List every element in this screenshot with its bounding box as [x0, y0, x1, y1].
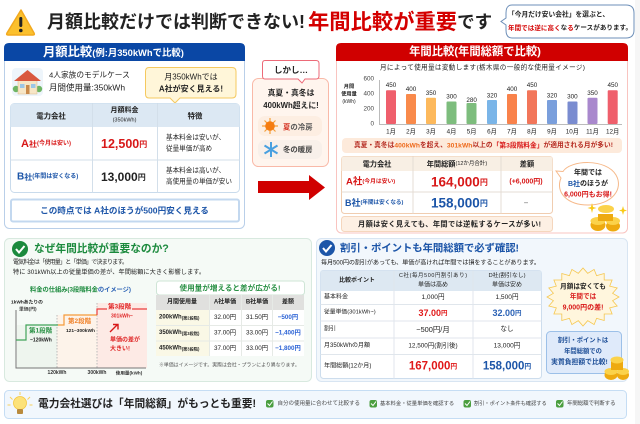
callout: header note: [501, 5, 634, 38]
bar chart: monthly usage: 月間: [344, 83, 354, 90]
row: company B: 基本料金は高いが、: [166, 166, 225, 174]
text: chart subtitle: 月によって使用量は変動します(栃木県の一般的な使用量イメージ): [380, 62, 585, 72]
row: monthly amount: 月350kWhの月額: [324, 341, 370, 349]
bar chart: monthly usage: 3月: [426, 128, 436, 136]
bar chart: monthly usage: 1月: [386, 128, 396, 136]
row: annual total: [324, 360, 531, 372]
text: why explanation: 電気料金は「使用量」と「単価」で決まります。: [13, 258, 128, 266]
row: 450 kWh: 33.00円: [246, 344, 268, 352]
text: why explanation: 特に 301kWh以上の従量単価の差が、年間総額に大きく影響します。: [13, 268, 205, 276]
table: unit price gap: A社単価: [214, 298, 236, 306]
row: basic fee: 1,000円: [421, 293, 445, 301]
checklist: check discounts: [464, 399, 547, 408]
row: company A: 基本料金は安いが、: [166, 132, 225, 142]
table: monthly price: 電力会社: [36, 112, 66, 120]
note: reversal: [342, 216, 552, 232]
bar chart: monthly usage: 使用量: [341, 90, 357, 98]
icon: green check: [12, 241, 28, 257]
callout: effective burden: [546, 332, 622, 374]
bar chart: monthly usage: 6月: [487, 128, 497, 136]
callout: effective burden: 年間総額での: [564, 346, 602, 355]
row: B annual: B社(年間は安くなる): [345, 197, 404, 208]
table: unit price gap: [156, 281, 304, 356]
callout: A looks cheaper: [146, 68, 236, 103]
checklist: check discounts: 割引・ポイント条件も確認する: [474, 399, 547, 407]
callout: header note: 年間では逆に高くなるケースがあります。: [508, 22, 632, 32]
checklist: compare by usage: [266, 399, 360, 408]
callout: effective burden: 割引・ポイントは: [558, 335, 609, 344]
checklist: compare by usage: 自分の使用量に合わせて比較する: [278, 399, 360, 407]
heading: why: なぜ年間比較が重要なのか?: [34, 242, 169, 255]
table: unit price gap: 使用量が増えると差が広がる!: [179, 282, 281, 292]
row: 450 kWh: [159, 344, 301, 352]
heading: bottom summary: 電力会社選びは「年間総額」がもっとも重要!: [38, 397, 256, 410]
table: monthly price: [10, 104, 240, 192]
row: B annual: 158,000円: [431, 196, 488, 210]
row: 350 kWh: 350kWh(第3段階): [159, 330, 200, 336]
callout: B saves 6000: 年間では: [574, 168, 602, 176]
chart: three-tier pricing: ~120kWh: [30, 338, 52, 344]
bar chart: monthly usage: 600: [363, 76, 374, 82]
banner: bottom summary: [4, 390, 626, 418]
bar chart: monthly usage: 400: [406, 86, 417, 93]
heading: annual comparison: 年間比較(年間総額で比較): [409, 44, 541, 58]
table: monthly price: (350kWh): [113, 118, 137, 124]
row: 450 kWh: 450kWh(第3段階): [159, 345, 200, 352]
row: unit price: 37.00円: [418, 308, 448, 318]
bar chart: monthly usage: 300: [446, 94, 457, 100]
row: 350 kWh: [159, 328, 301, 336]
chart: three-tier pricing: 120kWh: [48, 370, 66, 376]
heading: main title: 月額比較だけでは判断できない!年間比較が重要です: [47, 9, 492, 34]
bar chart: monthly usage: 7月: [507, 128, 517, 136]
row: 350 kWh: −1,400円: [275, 328, 301, 336]
callout: starburst 9000 yen: 年間では: [570, 292, 597, 300]
table: C vs D: 単価は安め: [492, 280, 522, 288]
bar chart: monthly usage: 11月: [586, 128, 599, 136]
checklist: judge by annual total: 年間総額で判断する: [567, 399, 616, 407]
table: unit price gap: 差額: [282, 298, 294, 306]
bar chart: monthly usage: [341, 76, 622, 136]
text: why explanation: [13, 258, 205, 276]
callout: header note: 「今月だけ安い会社」を選ぶと、: [508, 10, 609, 18]
bar chart: monthly usage: 350: [587, 90, 598, 97]
bar chart: monthly usage: 280: [466, 97, 477, 104]
panel: monthly comparison: [4, 43, 245, 228]
icon: warning triangle: [7, 10, 34, 35]
note: third tier: 真夏・真冬は400kWhを超え、301kWh以上の「第3段階料金」が適用される月が多い!: [354, 140, 613, 149]
row: 450 kWh: 37.00円: [214, 344, 236, 352]
row: company B: [17, 166, 232, 186]
row: company B: B社(年間は安くなる): [17, 172, 78, 182]
table: C vs D: D社(割引なし): [488, 271, 526, 279]
icon: gold coins: [588, 203, 627, 232]
bar chart: monthly usage: 450: [386, 82, 397, 89]
row: 200 kWh: 32.00円: [214, 313, 236, 321]
chart: three-tier pricing: 単価(円): [19, 306, 37, 312]
row: discount: なし: [500, 325, 514, 333]
chart: three-tier pricing: 第1段階: [29, 326, 53, 334]
row: unit price: 従量単価(301kWh~): [324, 308, 376, 316]
text: model case: 月間使用量:350kWh: [49, 82, 125, 92]
banner: monthly conclusion: [11, 200, 239, 222]
panel: discounts and points: [316, 238, 629, 382]
row: monthly amount: 12,500円(割引後): [408, 340, 458, 350]
table: annual total: [342, 156, 552, 214]
note: price disclaimer: ※単価はイメージです。実際は会社・プランにより異なります。: [159, 362, 300, 368]
text: over 400 kWh: 400kWh超えに!: [263, 100, 319, 110]
row: 200 kWh: 200kWh(第2段階): [159, 314, 200, 321]
row: company A: 従量単価が高め: [166, 144, 212, 152]
row: B annual: −: [524, 198, 529, 208]
row: annual total: 158,000円: [483, 360, 531, 372]
chart: three-tier pricing: 121~300kWh: [66, 328, 95, 334]
row: A annual: 164,000円: [431, 174, 488, 190]
bar chart: monthly usage: 320: [547, 92, 558, 100]
row: basic fee: 1,500円: [495, 293, 519, 301]
bar chart: monthly usage: 9月: [547, 128, 557, 136]
pill: summer cooling: 夏の冷房: [283, 122, 313, 131]
row: 200 kWh: −500円: [278, 313, 298, 321]
table: unit price gap: B社単価: [246, 298, 268, 306]
bar chart: monthly usage: 400: [507, 86, 518, 93]
note: reversal: 月額は安く見えても、年間では逆転するケースが多い!: [358, 220, 541, 228]
row: company B: 高使用量の単価が安い: [166, 176, 232, 186]
callout: B saves 6000: [556, 163, 618, 205]
table: annual total: 差額: [520, 160, 535, 168]
icon: house: [12, 68, 43, 96]
table: annual total: 年間総額(12か月合計): [427, 159, 487, 168]
row: A annual: A社(今月は安い): [346, 176, 395, 188]
heading: discounts: 割引・ポイントも年間総額で必ず確認!: [340, 242, 519, 254]
chart: three-tier pricing: 1kWhあたりの: [11, 298, 43, 306]
callout: starburst 9000 yen: 月額は安くても: [560, 282, 606, 290]
row: annual total: 167,000円: [409, 360, 457, 372]
title: [7, 9, 492, 35]
row: monthly amount: [324, 340, 521, 350]
bar chart: monthly usage: 4月: [447, 128, 456, 136]
text: discounts explanation: 毎月500円の割引があっても、単価が高ければ年間では損をすることがあります。: [321, 258, 540, 266]
bar chart: monthly usage: 10月: [566, 128, 579, 136]
row: company A: 12,500円: [101, 137, 147, 151]
bar chart: monthly usage: 8月: [527, 128, 537, 136]
table: C vs D: 比較ポイント: [339, 276, 375, 284]
text: model case: [49, 70, 130, 92]
text: over 400 kWh: [263, 88, 319, 110]
bar chart: monthly usage: 350: [426, 90, 437, 97]
callout: starburst 9000 yen: 9,000円の差!: [563, 302, 603, 312]
bar chart: monthly usage: 300: [567, 94, 578, 100]
table: unit price gap: 月間使用量: [167, 298, 197, 306]
row: 200 kWh: 31.50円: [246, 313, 268, 321]
bar chart: monthly usage: 320: [487, 92, 498, 100]
chart: three-tier pricing: 300kWh: [88, 370, 106, 376]
bar chart: monthly usage: 2月: [406, 128, 416, 136]
chart: three-tier pricing: 第2段階: [68, 316, 92, 325]
bar chart: monthly usage: 5月: [467, 128, 477, 136]
panel: why annual comparison: [4, 238, 312, 382]
text: model case: 4人家族のモデルケース: [49, 70, 130, 80]
icon: blue check: [319, 240, 335, 256]
heading: monthly comparison: 月額比較(例:月350kWhで比較): [43, 44, 184, 59]
heading: monthly comparison: [4, 43, 245, 61]
banner: monthly conclusion: この時点では A社のほうが500円安く見える: [40, 204, 209, 216]
table: annual total: 電力会社: [363, 160, 392, 168]
note: third tier: [342, 138, 622, 153]
row: company A: A社(今月は安い): [21, 138, 71, 150]
row: discount: 割引: [324, 324, 336, 332]
arrow: to annual comparison: [258, 175, 325, 200]
row: 350 kWh: 37.00円: [214, 328, 236, 336]
row: company A: [21, 132, 225, 152]
bar chart: monthly usage: 12月: [606, 128, 619, 136]
row: 200 kWh: [159, 313, 298, 321]
checklist: check fees: 基本料金・従量単価を確認する: [380, 399, 454, 407]
chart: three-tier pricing: [11, 284, 147, 376]
chart: three-tier pricing: 料金の仕組み(3段階料金のイメージ): [30, 284, 131, 293]
row: 450 kWh: −1,800円: [275, 344, 301, 352]
panel: however: [252, 60, 328, 166]
callout: B saves 6000: B社のほうが: [568, 178, 608, 188]
table: monthly price: 月額料金: [110, 105, 138, 114]
callout: A looks cheaper: 月350kWhでは: [164, 72, 218, 82]
callout: effective burden: 実質負担額で比較!: [551, 357, 608, 366]
chart: three-tier pricing: 301kWh~: [111, 314, 133, 320]
chart: three-tier pricing: 第3段階: [108, 302, 132, 310]
icon: light bulb: [8, 392, 32, 414]
table: monthly price: 特徴: [188, 112, 203, 120]
icon: coins: [604, 356, 629, 380]
table: C vs D: C社(毎月500円割引あり): [399, 271, 467, 279]
row: discount: [324, 324, 514, 334]
row: unit price: 32.00円: [492, 308, 522, 318]
chart: three-tier pricing: 使用量(kWh): [116, 370, 143, 376]
bar chart: monthly usage: 400: [363, 90, 374, 98]
row: discount: −500円/月: [416, 325, 450, 334]
row: annual total: 年間総額(12か月): [324, 362, 371, 370]
row: 350 kWh: 33.00円: [246, 328, 268, 336]
row: monthly amount: 13,000円: [494, 342, 521, 350]
chart: three-tier pricing: 単価の差が: [110, 336, 140, 344]
callout: A looks cheaper: A社が安く見える!: [159, 84, 223, 94]
bar chart: monthly usage: 450: [607, 82, 618, 89]
chart: three-tier pricing: 大きい!: [110, 344, 130, 352]
callout: however: しかし…: [274, 65, 308, 75]
pill: winter heating: 冬の暖房: [283, 145, 313, 154]
row: B annual: [345, 196, 529, 210]
table: C vs D: 単価は高め: [418, 280, 448, 288]
row: unit price: [324, 308, 522, 318]
heading: annual comparison: [336, 43, 628, 61]
text: over 400 kWh: 真夏・真冬は: [268, 88, 315, 98]
bar chart: monthly usage: 200: [363, 106, 374, 112]
row: company B: 13,000円: [101, 170, 146, 184]
bar chart: monthly usage: 450: [527, 82, 538, 89]
bar chart: monthly usage: (kWh): [342, 99, 356, 105]
row: A annual: (+6,000円): [509, 178, 543, 186]
checklist: judge by annual total: [556, 399, 616, 408]
checklist: check fees: [370, 399, 454, 408]
bar chart: monthly usage: 0: [370, 120, 374, 128]
callout: starburst 9000 yen: [547, 268, 619, 326]
row: basic fee: 基本料金: [324, 292, 348, 300]
row: A annual: [346, 174, 543, 190]
callout: B saves 6000: 6,000円もお得!: [564, 190, 612, 198]
panel: annual comparison: [336, 43, 628, 233]
row: basic fee: [324, 292, 519, 301]
table: C vs D: [320, 270, 542, 378]
